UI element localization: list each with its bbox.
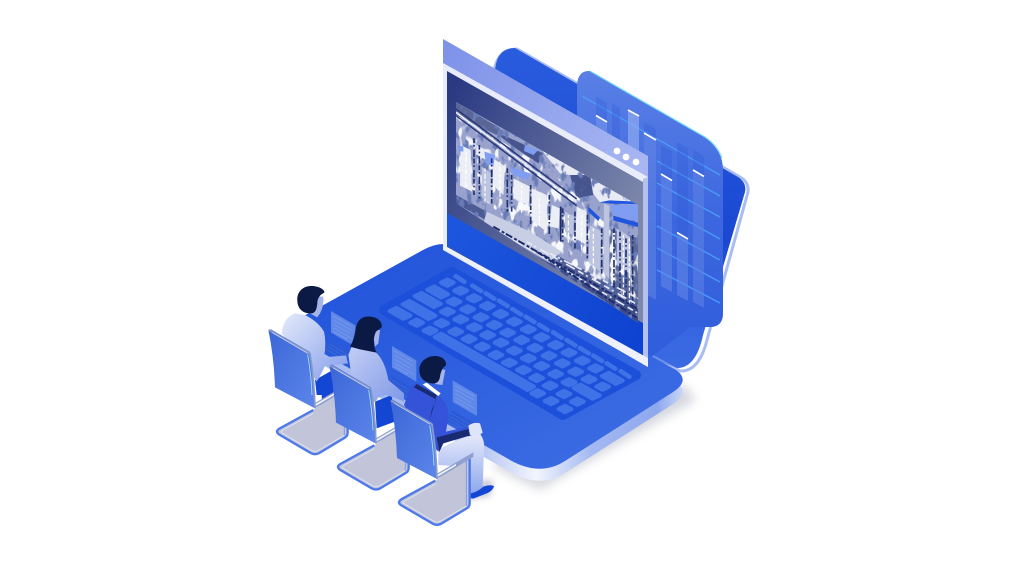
street photo [456,102,638,323]
illustration: audience watching a giant laptop [268,39,750,526]
audience [268,286,494,525]
floor shadows [320,410,493,500]
lower blue area [447,213,643,358]
front data panel with bars [577,71,723,358]
person 1: man in white shirt [282,286,348,416]
photo vertical detail [474,138,633,308]
lower frame lip [443,247,648,367]
window frame [443,63,648,367]
person 2: woman [348,317,406,470]
chair 3 [390,400,473,525]
ground [456,195,487,220]
window controls [614,148,639,165]
laptop base top [291,244,683,469]
keyboard tray [384,272,636,415]
person 1: laptop [324,311,355,361]
rail lines [456,109,577,206]
lower noise flecks [500,232,638,313]
browser window on laptop screen [443,39,648,367]
person 2: laptop [385,346,416,396]
person 3: laptop [446,380,477,430]
dark screen [447,71,643,358]
photo noise [456,102,638,323]
chair 2 [329,365,412,489]
laptop base edge [291,256,683,481]
person 3: man in blue jacket [404,356,494,499]
sky [542,150,638,203]
back folder [494,48,748,371]
chair 1 [268,329,351,454]
grid lines [582,96,720,303]
buildings [460,145,587,262]
floor shadow under laptop [490,384,696,490]
window title bar [443,39,648,182]
bars [596,110,704,308]
keyboard keys [390,276,630,412]
blue highlights [588,200,638,227]
